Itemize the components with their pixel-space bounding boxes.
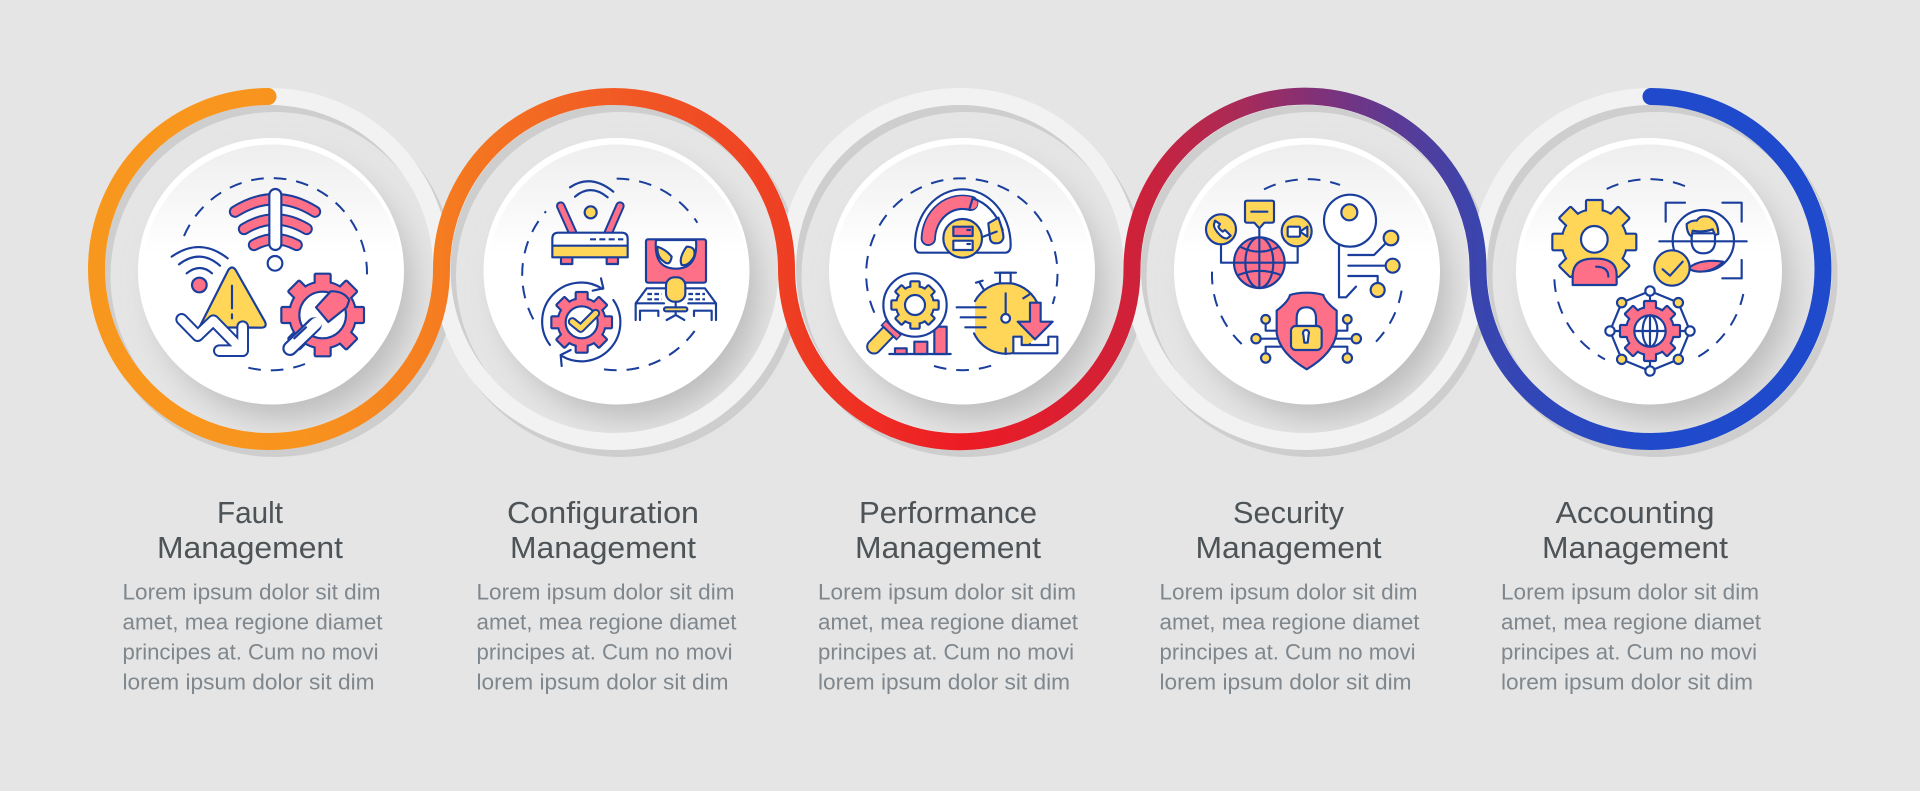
disc shadows bbox=[157, 163, 1791, 419]
heading: security management: Security bbox=[1233, 496, 1345, 530]
text block: security management: Lorem ipsum dolor sit dim bbox=[1160, 579, 1418, 604]
text block: fault management bbox=[122, 579, 383, 694]
icon: fault management bbox=[172, 178, 367, 370]
text block: performance management: amet, mea regione diamet bbox=[818, 609, 1079, 634]
heading: fault management: Fault bbox=[217, 496, 284, 530]
panel: fault management disc bbox=[138, 138, 404, 404]
panel: accounting management disc bbox=[1516, 138, 1782, 404]
heading: performance management: Performance bbox=[859, 496, 1037, 530]
heading: configuration management bbox=[507, 496, 699, 565]
heading: accounting management bbox=[1542, 496, 1729, 565]
icon: configuration management bbox=[522, 179, 716, 370]
icon: performance management bbox=[866, 178, 1057, 370]
text block: security management: lorem ipsum dolor sit dim bbox=[1160, 669, 1412, 694]
text block: fault management: principes at. Cum no movi bbox=[122, 639, 378, 664]
text block: performance management: Lorem ipsum dolor sit dim bbox=[818, 579, 1076, 604]
heading: configuration management: Management bbox=[510, 531, 697, 565]
text block: accounting management: Lorem ipsum dolor sit dim bbox=[1501, 579, 1759, 604]
panel: configuration management disc bbox=[484, 138, 750, 404]
text block: performance management: lorem ipsum dolor sit dim bbox=[818, 669, 1070, 694]
panel: security management disc bbox=[1174, 138, 1440, 404]
heading: performance management bbox=[855, 496, 1042, 565]
text block: accounting management: principes at. Cum no movi bbox=[1501, 639, 1757, 664]
heading: performance management: Management bbox=[855, 531, 1042, 565]
heading: accounting management: Management bbox=[1542, 531, 1729, 565]
text block: performance management: principes at. Cum no movi bbox=[818, 639, 1074, 664]
text block: fault management: amet, mea regione diamet bbox=[122, 609, 383, 634]
text block: fault management: lorem ipsum dolor sit dim bbox=[122, 669, 374, 694]
text block: configuration management: Lorem ipsum dolor sit dim bbox=[476, 579, 734, 604]
icon: accounting management bbox=[1552, 179, 1747, 376]
heading: security management bbox=[1196, 496, 1382, 565]
text block: configuration management: principes at. Cum no movi bbox=[476, 639, 732, 664]
heading: fault management: Management bbox=[157, 531, 344, 565]
panel: performance management disc bbox=[829, 138, 1095, 404]
text block: fault management: Lorem ipsum dolor sit dim bbox=[122, 579, 380, 604]
text block: configuration management: lorem ipsum dolor sit dim bbox=[476, 669, 728, 694]
text block: security management: principes at. Cum no movi bbox=[1160, 639, 1416, 664]
heading: accounting management: Accounting bbox=[1556, 496, 1714, 530]
text block: accounting management: amet, mea regione diamet bbox=[1501, 609, 1762, 634]
text block: security management: amet, mea regione diamet bbox=[1160, 609, 1420, 634]
text block: accounting management: lorem ipsum dolor sit dim bbox=[1501, 669, 1753, 694]
ring shadows bbox=[102, 104, 1829, 448]
heading: security management: Management bbox=[1196, 531, 1382, 565]
text block: configuration management: amet, mea regione diamet bbox=[476, 609, 737, 634]
text block: accounting management bbox=[1501, 579, 1762, 694]
heading: configuration management: Configuration bbox=[507, 496, 699, 530]
icon: security management bbox=[1206, 179, 1403, 369]
text block: security management bbox=[1160, 579, 1420, 694]
text block: configuration management bbox=[476, 579, 737, 694]
heading: fault management bbox=[157, 496, 344, 565]
ring tracks bbox=[96, 96, 1824, 442]
text block: performance management bbox=[818, 579, 1079, 694]
gradient flow line bbox=[97, 96, 1823, 442]
